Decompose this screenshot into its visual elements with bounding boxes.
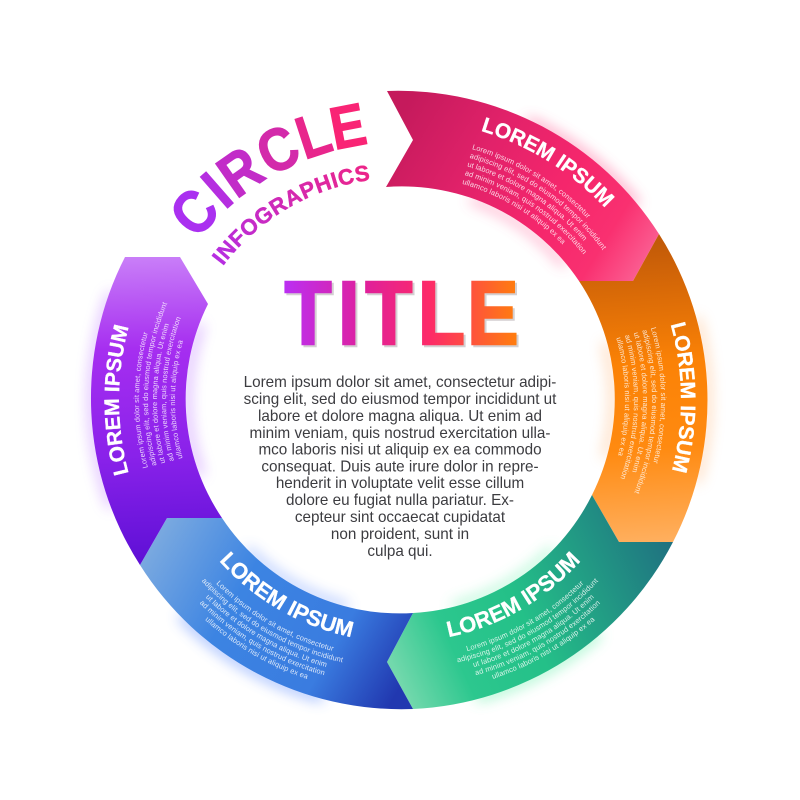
text block: central description: Lorem ipsum dolor sit amet, consectetur adipi- bbox=[244, 374, 556, 391]
text block: central description: labore et dolore magna aliqua. Ut enim ad bbox=[258, 408, 542, 425]
text block: central description: dolore eu fugiat nulla pariatur. Ex- bbox=[286, 492, 514, 509]
text block: central description: non proident, sunt in bbox=[331, 526, 469, 543]
text block: central description: henderit in voluptate velit esse cillum bbox=[276, 475, 524, 492]
text block: purple segment: ad minim veniam, quis nostrud exercitation bbox=[160, 317, 181, 461]
text block: orange segment: Lorem ipsum dolor sit amet, consectetur bbox=[651, 327, 666, 464]
text block: purple segment: adipiscing elit, sed do eiusmod tempor incididunt bbox=[142, 302, 168, 466]
text block: central description: minim veniam, quis nostrud exercitation ulla- bbox=[250, 425, 550, 442]
heading: purple segment: LOREM IPSUM bbox=[104, 324, 128, 476]
heading: pink segment: LOREM IPSUM bbox=[482, 117, 615, 208]
panel: orange segment bbox=[579, 234, 720, 542]
text block: orange segment: adipiscing elit, sed do eiusmod tempor incididunt bbox=[634, 330, 658, 494]
text block: central description: culpa qui. bbox=[367, 543, 433, 560]
text block: purple segment: ullamco laboris nisi ut aliquip ex ea bbox=[170, 340, 183, 459]
text block: central description: cepteur sint occaecat cupidatat bbox=[295, 509, 506, 526]
text block: central description: mco laboris nisi ut aliquip ex ea commodo bbox=[258, 442, 542, 458]
heading: circle infographics: R bbox=[205, 133, 275, 210]
title: TITLE bbox=[287, 264, 521, 365]
text block: purple segment: Lorem ipsum dolor sit amet, consectetur bbox=[134, 332, 148, 468]
panel: green segment bbox=[387, 495, 673, 709]
heading: circle infographics: E bbox=[324, 90, 371, 162]
title: TITLE bbox=[285, 262, 519, 363]
heading: circle infographics: I bbox=[189, 160, 244, 220]
text block: central description bbox=[244, 374, 557, 560]
text block: blue segment: adipiscing elit, sed do eiusmod tempor incididunt bbox=[202, 579, 344, 662]
text block: blue segment: ad minim veniam, quis nostrud exercitation bbox=[200, 601, 324, 676]
text block: orange segment: ullamco laboris nisi ut aliquip ex ea bbox=[616, 337, 630, 456]
heading: circle infographics: C bbox=[246, 111, 310, 188]
text block: blue segment: ullamco laboris nisi ut aliquip ex ea bbox=[206, 617, 308, 679]
text block: pink segment: ut labore et dolore magna aliqua. Ut enim bbox=[468, 162, 586, 241]
text block: pink segment: adipiscing elit, sed do eiusmod tempor incididunt bbox=[470, 154, 606, 250]
heading: green segment: LOREM IPSUM bbox=[446, 551, 580, 637]
heading: circle infographics: INFOGRAPHICS bbox=[212, 166, 370, 266]
text block: pink segment: ullamco laboris nisi ut aliquip ex ea bbox=[462, 180, 564, 244]
panel: purple segment bbox=[80, 257, 222, 565]
text block: central description: consequat. Duis aute irure dolor in repre- bbox=[261, 458, 539, 476]
heading: circle infographics: L bbox=[288, 98, 339, 172]
text block: green segment: ullamco laboris nisi ut aliquip ex ea bbox=[492, 618, 595, 679]
heading: circle infographics bbox=[157, 90, 371, 266]
text block: orange segment: ad minim veniam, quis nostrud exercitation bbox=[620, 335, 640, 479]
text block: green segment: ad minim veniam, quis nostrud exercitation bbox=[475, 601, 600, 675]
heading: circle infographics: C bbox=[157, 175, 232, 249]
panel: pink segment bbox=[386, 90, 659, 281]
heading: blue segment: LOREM IPSUM bbox=[220, 551, 354, 638]
text block: pink segment: Lorem ipsum dolor sit amet, consectetur bbox=[472, 144, 590, 218]
heading: orange segment: LOREM IPSUM bbox=[670, 322, 696, 473]
text block: central description: scing elit, sed do eiusmod tempor incididunt ut bbox=[244, 391, 557, 408]
text block: blue segment: ut labore et dolore magna aliqua. Ut enim bbox=[206, 594, 326, 667]
text block: green segment: adipiscing elit, sed do eiusmod tempor incididunt bbox=[457, 578, 598, 662]
text block: purple segment bbox=[134, 302, 183, 468]
text block: orange segment bbox=[616, 327, 666, 494]
text block: purple segment: ut labore et dolore magna aliqua. Ut enim bbox=[152, 324, 169, 464]
text block: green segment: Lorem ipsum dolor sit amet, consectetur bbox=[466, 580, 583, 651]
text block: pink segment: ad minim veniam, quis nostrud exercitation bbox=[465, 172, 586, 254]
text block: orange segment: ut labore et dolore magna aliqua. Ut enim bbox=[632, 332, 648, 472]
text block: blue segment: Lorem ipsum dolor sit amet, consectetur bbox=[216, 580, 334, 651]
text block: green segment: ut labore et dolore magna aliqua. Ut enim bbox=[473, 595, 594, 667]
panel: blue segment bbox=[140, 518, 413, 710]
